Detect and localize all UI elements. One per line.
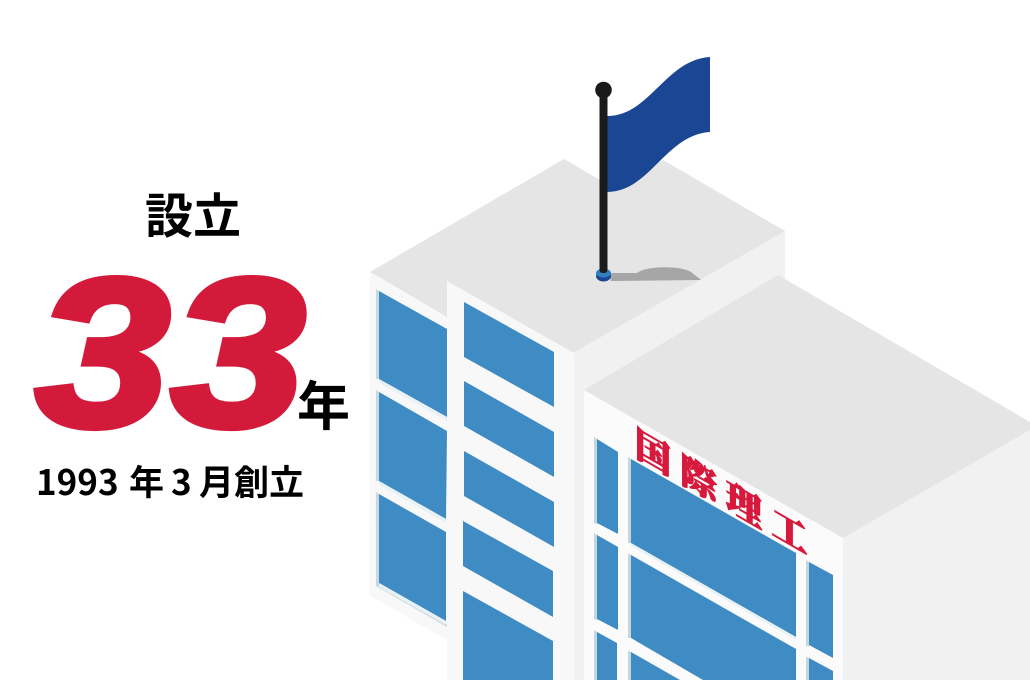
- unit: years: 年: [297, 365, 350, 441]
- flag shadow: [608, 267, 701, 281]
- front wing wall with windows: [447, 281, 574, 680]
- flag pole: [595, 82, 612, 282]
- founding date text: 1993: [36, 455, 119, 506]
- founding date text: 3: [171, 455, 192, 506]
- big number: 33: 33: [35, 234, 306, 471]
- illustration: isometric building: [369, 57, 1030, 680]
- founding date text: 月創立: [199, 455, 304, 506]
- flag banner: [607, 57, 710, 192]
- front building roof: [584, 275, 1030, 538]
- building sign: 国際理工: [635, 414, 817, 571]
- rear building roof: [370, 159, 785, 353]
- heading: established: 設立: [145, 177, 241, 247]
- front building right wall: [843, 430, 1030, 680]
- rear building side wall: [573, 231, 785, 680]
- founding date text: 年: [129, 455, 164, 506]
- front building left wall with windows: [584, 389, 843, 680]
- left building wing wall: [369, 273, 447, 640]
